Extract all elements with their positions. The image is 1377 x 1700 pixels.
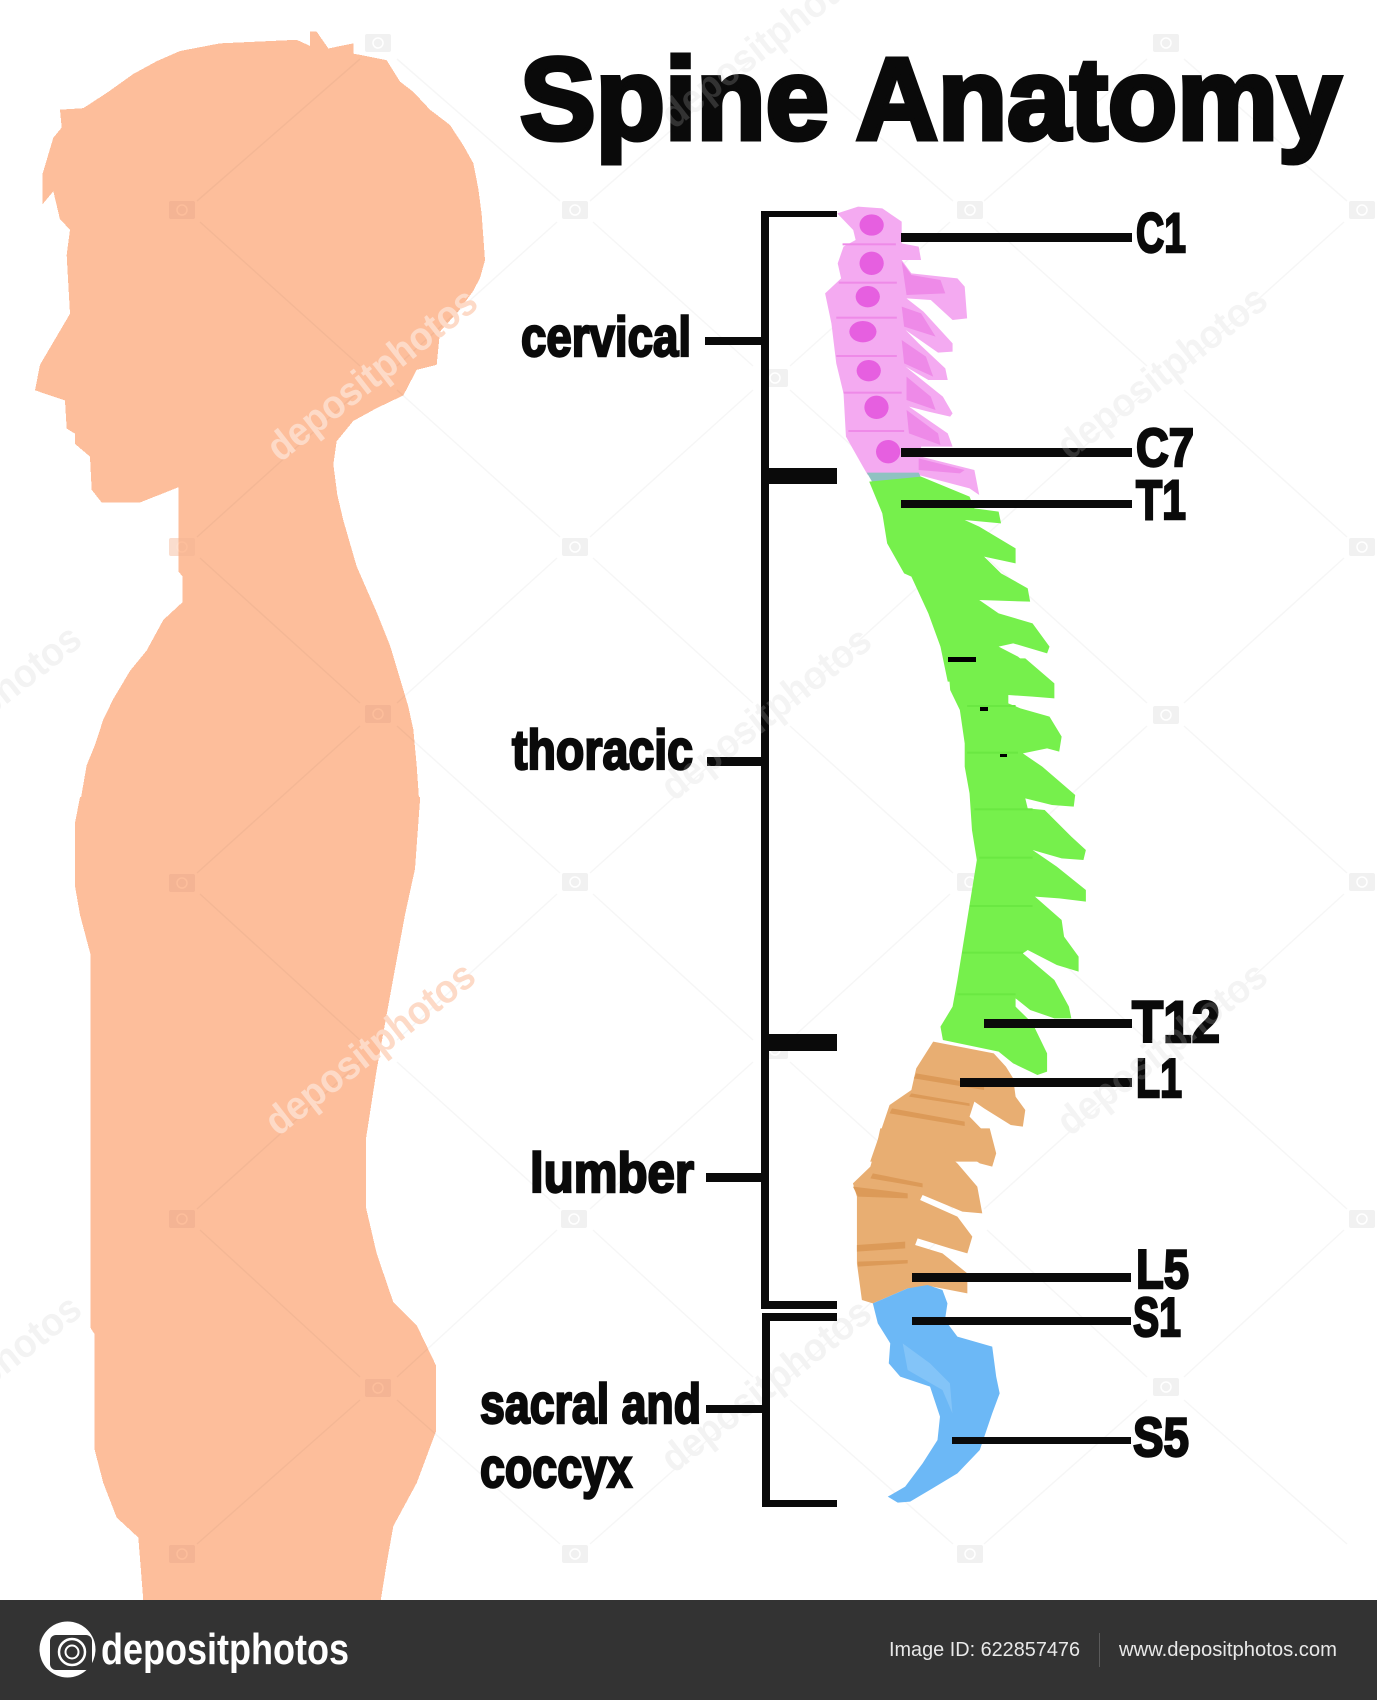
region label: sacral and coccyx: sacral and	[480, 1372, 701, 1435]
vertebra label: T1: T1	[1136, 468, 1186, 531]
spine: sacrum and coccyx	[873, 1285, 1000, 1503]
spine: thoracic vertebrae	[869, 477, 1086, 1075]
footer brand name: depositphotos	[101, 1625, 349, 1674]
region label: sacral and coccyx: coccyx	[480, 1436, 632, 1499]
stock-photo watermarks: depositphotos	[1048, 277, 1276, 468]
vertebra label: T12: T12	[1132, 990, 1220, 1055]
stock-photo watermarks: depositphotos	[258, 279, 486, 470]
icon: camera logo	[40, 1622, 96, 1678]
human body silhouette	[35, 32, 485, 1601]
vertebra label: C7: C7	[1136, 418, 1194, 478]
vertebra label: S1: S1	[1133, 1286, 1181, 1348]
stock-photo watermarks: depositphotos	[1048, 953, 1276, 1144]
spine: lumbar vertebrae	[853, 1042, 1025, 1303]
vertebra leader lines	[901, 233, 1132, 1444]
region label: thoracic: thoracic	[512, 718, 693, 781]
vertebra label: L5: L5	[1136, 1238, 1189, 1300]
watermark overlay on dark elements: depositphotos	[652, 618, 880, 809]
title: Spine Anatomy	[520, 34, 1341, 164]
watermark overlay on dark elements: depositphotos	[1048, 953, 1276, 1144]
footer website: www.depositphotos.com	[1118, 1639, 1337, 1661]
footer image id: Image ID: 622857476	[889, 1639, 1080, 1661]
vertebra label: S5: S5	[1133, 1406, 1189, 1468]
region label: sacral and coccyx	[480, 1372, 701, 1499]
spine: cervical vertebrae	[825, 207, 979, 495]
stock-photo watermarks: depositphotos	[652, 618, 880, 809]
region brackets	[705, 211, 837, 1507]
region label: cervical: cervical	[521, 305, 691, 368]
region label: lumber: lumber	[530, 1141, 694, 1204]
vertebra label: L1: L1	[1136, 1047, 1182, 1109]
footer bar	[0, 1600, 1377, 1700]
stock-photo watermarks: depositphotos	[652, 1290, 880, 1481]
vertebra label: C1: C1	[1136, 201, 1186, 264]
stock-photo watermarks: depositphotos	[256, 953, 484, 1144]
watermark overlay on dark elements: depositphotos	[1048, 277, 1276, 468]
watermark overlay on dark elements	[652, 0, 1276, 1144]
